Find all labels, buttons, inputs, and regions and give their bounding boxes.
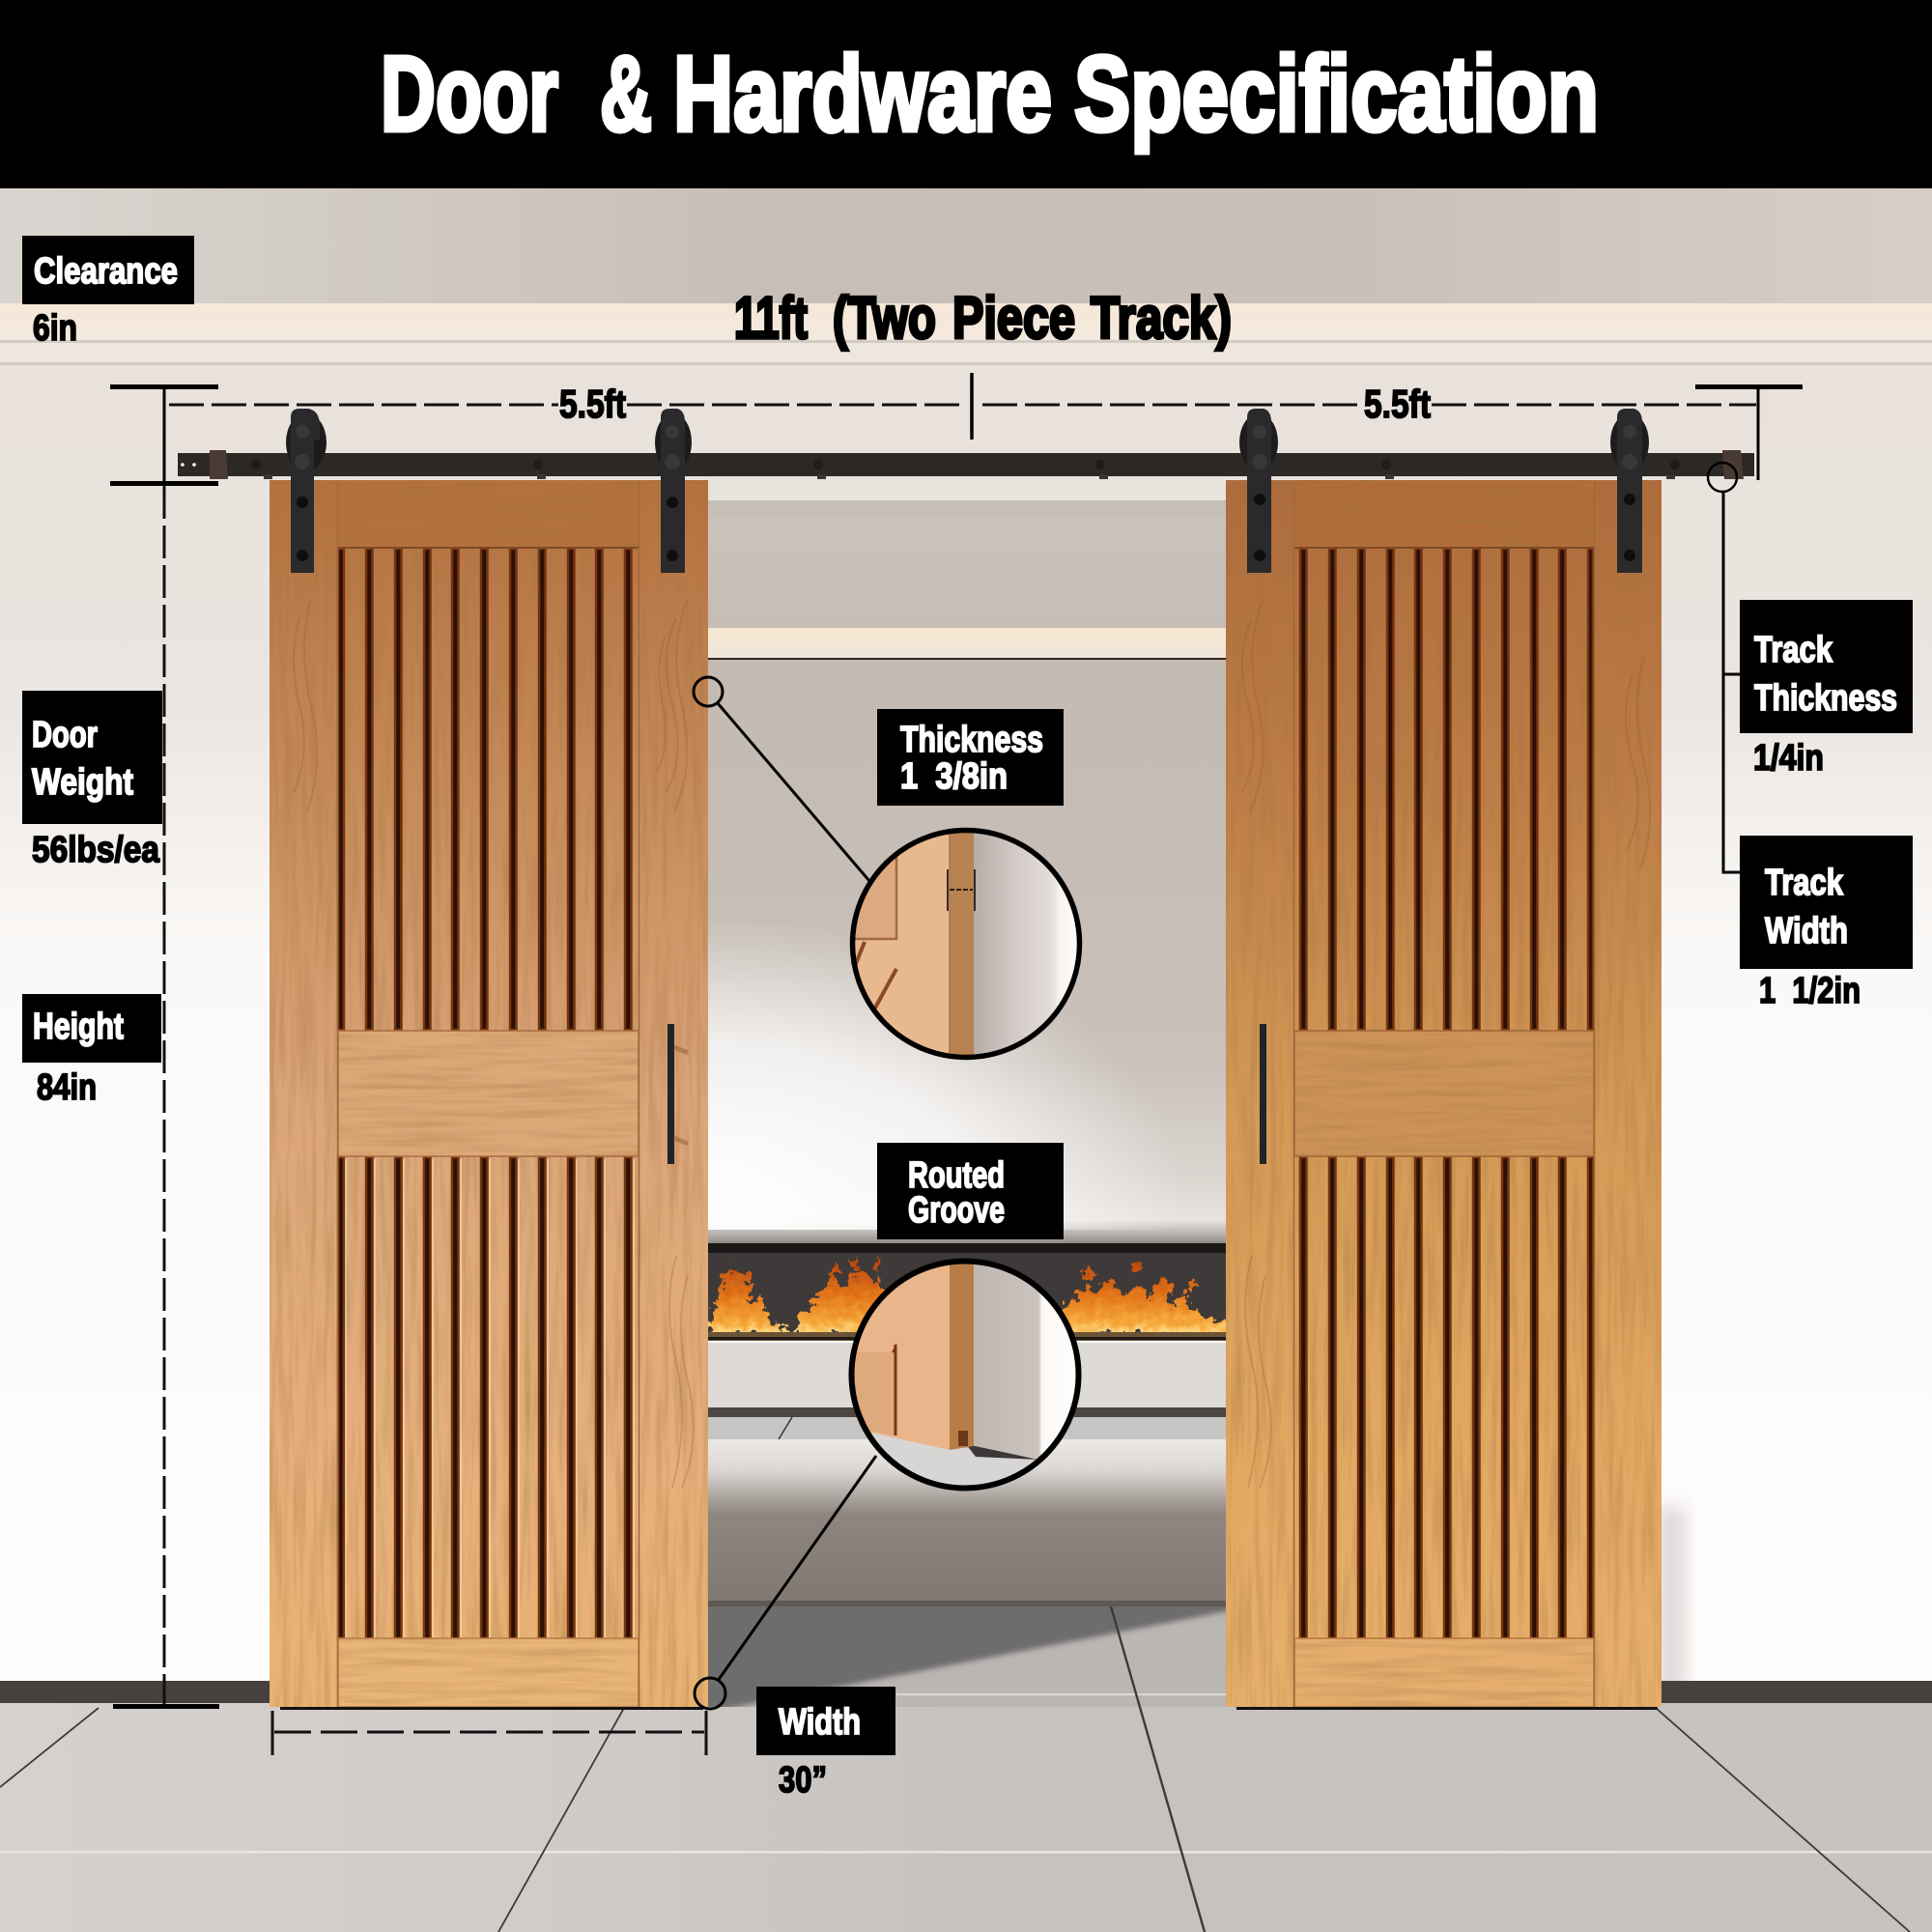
hangers [286, 409, 1649, 573]
track length heading [734, 285, 1232, 351]
routed groove label: Routed [908, 1155, 1005, 1196]
right track end bracket [1695, 384, 1803, 480]
door height dimension line [113, 486, 219, 1709]
thickness label: Thickness [900, 720, 1043, 760]
thickness callout leader [694, 677, 869, 881]
top rail [338, 481, 639, 549]
slats and grooves [338, 549, 632, 1638]
track rail [178, 450, 1754, 479]
hanger 2 [655, 409, 692, 573]
hanger 4 [1610, 409, 1649, 573]
title [381, 35, 1599, 154]
height label: Height [33, 1007, 124, 1047]
title: Door [381, 35, 558, 154]
value: 56lbs/ea: 56lbs/ea [32, 830, 160, 870]
width label [756, 1687, 895, 1801]
clearance bracket [110, 384, 218, 486]
label: 5.5ft right: 5.5ft [1364, 382, 1431, 426]
door weight label: Weight [32, 762, 133, 803]
detail circle: routed groove [848, 1258, 1082, 1492]
center tick [970, 373, 974, 440]
routed groove label [877, 1143, 1064, 1239]
bottom rail [1294, 1638, 1594, 1707]
door handle [1260, 1024, 1266, 1164]
door handle [668, 1024, 688, 1164]
slats and grooves [1300, 549, 1593, 1638]
width label: Width [779, 1702, 861, 1743]
header bar [0, 0, 1932, 188]
track thickness label [1740, 600, 1913, 779]
height label [22, 994, 161, 1108]
value: 1/4in: 1/4in [1753, 738, 1824, 779]
right door [1226, 480, 1662, 1708]
value: 6in: 6in [33, 308, 77, 349]
groove callout leader [718, 1456, 876, 1681]
opening: interior room with fireplace [696, 480, 1246, 1932]
stile grain figure [294, 599, 694, 1488]
track length heading: Track) [1091, 285, 1232, 351]
track thickness label: Track [1754, 630, 1833, 670]
middle rail [1294, 1031, 1594, 1156]
track length heading: (Two [833, 285, 936, 351]
track callout lines [1708, 463, 1740, 872]
title: Specification [1074, 35, 1599, 154]
left door [270, 480, 708, 1708]
track length heading: 11ft [734, 285, 808, 351]
thickness label [877, 709, 1064, 806]
width marker circle [695, 1678, 725, 1709]
title: Hardware [673, 35, 1052, 154]
clearance label: Clearance [34, 251, 178, 292]
value: 84in: 84in [37, 1067, 97, 1108]
track width label: Track [1765, 863, 1844, 903]
middle rail [338, 1031, 639, 1156]
stile grain figure [1242, 599, 1650, 1488]
top rail [1294, 481, 1594, 549]
detail circle: door thickness [850, 826, 1082, 1063]
hanger 3 [1239, 409, 1278, 573]
track width label: Width [1765, 911, 1848, 952]
mini thickness dimension [948, 869, 975, 911]
hanger 1 [286, 409, 327, 573]
door weight label: Door [32, 715, 98, 755]
routed groove label: Groove [908, 1190, 1005, 1231]
title: & [600, 35, 652, 154]
track thickness label: Thickness [1754, 678, 1897, 719]
door weight label [22, 691, 162, 870]
value: 30in: 30” [779, 1760, 827, 1801]
flames left [708, 1256, 894, 1335]
fireplace strip [708, 1243, 1227, 1341]
track length heading: Piece [952, 285, 1075, 351]
flames right [1048, 1258, 1227, 1335]
label: 5.5ft left: 5.5ft [559, 382, 626, 426]
value: 1 1/2in: 1 1/2in [1759, 971, 1861, 1011]
bottom rail [338, 1638, 639, 1707]
track width label [1740, 836, 1913, 1011]
clearance label [22, 236, 194, 349]
door width dimension [272, 1711, 706, 1755]
thickness label: 1 3/8in [900, 756, 1008, 797]
